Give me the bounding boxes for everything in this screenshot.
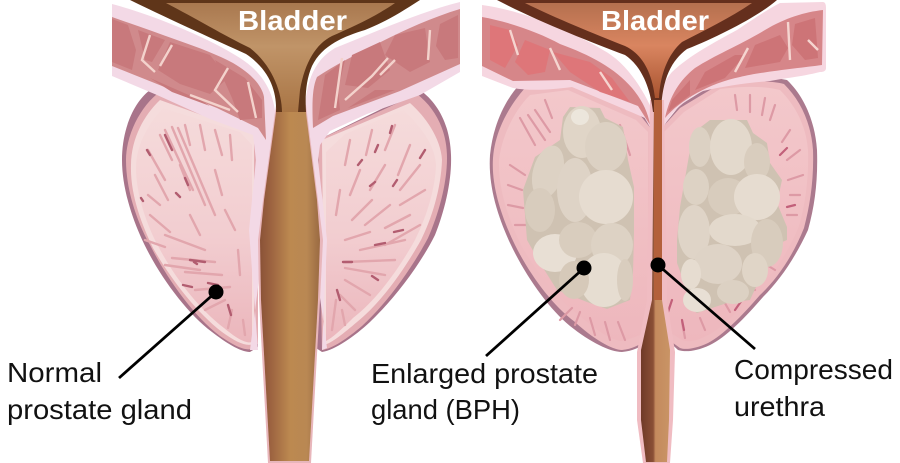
callout: compressed urethra: urethra — [734, 391, 825, 422]
diagram: normal prostate — [112, 0, 460, 463]
muscle band: right of enlarged bladder — [658, 2, 826, 130]
callout: enlarged prostate gland: gland (BPH) — [371, 394, 520, 425]
callout: normal prostate gland: prostate gland — [7, 394, 192, 425]
urethra: compressed — [497, 0, 777, 463]
callout: compressed urethra — [650, 258, 893, 422]
gland: right lobe of enlarged prostate — [660, 78, 817, 351]
enlarged tissue: right lobe — [677, 119, 787, 313]
label: Bladder: Bladder — [601, 5, 709, 36]
callout: enlarged prostate gland: Enlarged prostate — [371, 358, 598, 389]
gland: left lobe of normal prostate — [122, 90, 258, 352]
callout: normal prostate gland: Normal — [7, 357, 102, 388]
urethra of normal prostate — [130, 0, 420, 463]
muscle band: left of enlarged bladder — [482, 5, 654, 135]
callout: enlarged prostate gland — [371, 260, 598, 425]
label: Bladder: Bladder — [238, 5, 347, 36]
callout: compressed urethra: Compressed — [734, 354, 893, 385]
enlarged tissue: left lobe — [523, 106, 634, 309]
muscle band: right of normal bladder — [304, 2, 460, 350]
gland: right lobe of normal prostate — [316, 90, 451, 352]
diagram: enlarged prostate — [482, 0, 826, 463]
muscle band: left of normal bladder — [112, 4, 276, 350]
callout: normal prostate gland — [7, 284, 224, 425]
gland: left lobe of enlarged prostate — [490, 82, 652, 352]
